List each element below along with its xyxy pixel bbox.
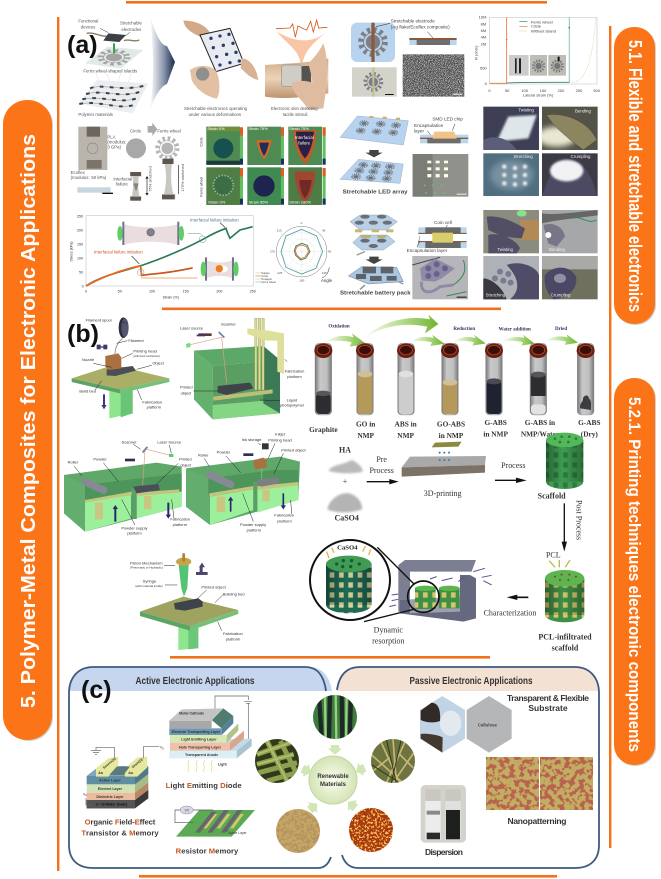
figure: selective laser sintering printer: platform: [173, 522, 188, 527]
figure: stretchable LED array: layer: [414, 129, 425, 134]
powder: CaSO4: [327, 493, 362, 512]
vial labels: GO in: [356, 419, 375, 428]
figure: inkjet powder printer: Printing head: [268, 437, 292, 442]
figure: ferris wheel device stack: Polymer materials: [78, 112, 113, 117]
diagram: resistor memory: V/I: [185, 808, 189, 812]
figure: electronic skin on forearm: Electronic skin detecting: [271, 106, 318, 111]
figure: stretchable battery pack: Encapsulation layer: [407, 248, 448, 253]
figure: stereolithography printer: platform: [287, 374, 302, 379]
figure: syringe extrusion printer: [130, 553, 245, 650]
photos: battery pack under deformation: Twisting: [497, 247, 514, 252]
panel a: flexible and stretchable electronics: [67, 14, 601, 299]
label: Organic Field-Effect Transistor & Memory: Transistor & Memory: [81, 829, 159, 838]
figure: strain heat maps: Strain 85%: [249, 199, 269, 204]
label: Resistor Memory: Resistor Memory: [176, 847, 239, 856]
figure: syringe extrusion printer: Syringe: [143, 579, 157, 584]
chart: stress vs strain: 50: [118, 289, 122, 293]
figure: stretchable electrode schematic: Stretchable electrode: [391, 19, 435, 24]
diagram: light emitting diode stack: Transparent Anode: [185, 753, 218, 757]
vial labels: [309, 418, 601, 440]
photos: battery pack under deformation: [483, 210, 598, 299]
figure: stretchable battery pack: [340, 215, 468, 299]
renewable materials hub: Materials: [320, 782, 347, 788]
figure: fused deposition printer: Nozzle: [82, 357, 95, 362]
figure: scaffold printing process: Process: [369, 466, 394, 475]
figure: graphite vial process: Reduction: [453, 327, 475, 332]
label: transparent and flexible substrate: Substrate: [528, 703, 568, 713]
chart: polar plot of angle: Angle: [321, 278, 333, 283]
diagram: organic field-effect transistor stack: Active Layer: [99, 779, 121, 783]
figure: scaffold printing process: HA: [339, 446, 351, 455]
label (a): (a): [67, 31, 98, 59]
vial labels: NMP: [357, 431, 375, 440]
chart: resistance vs lateral strain: Ferris wheel: [531, 19, 553, 24]
figure: scaffold printing process: +: [343, 477, 348, 486]
figure: tensile test specimens: Ferris wheel: [157, 129, 181, 134]
hexagon: cellulose: [467, 696, 512, 753]
renewable materials hub: [309, 756, 357, 804]
figure: scaffold printing process: Post Process: [575, 500, 584, 540]
right section pill: 5.2.1 Printing techniques electronic components: 5.2.1. Printing techniques electronic components: [625, 397, 644, 752]
renewable materials hub: Renewable: [317, 774, 349, 780]
chart: polar plot of angle: 270: [270, 250, 275, 254]
figure: tensile test specimens: PLA: [107, 134, 116, 139]
material photo: wheat: [371, 739, 415, 783]
panel header: active electronic applications: Active Electronic Applications: [136, 676, 255, 687]
left section pill: 5. Polymer-Metal Composites: [3, 100, 53, 741]
figure: scaffold printing process: Process: [501, 461, 526, 470]
figure: stereolithography printer: object: [181, 390, 192, 395]
powder: HA: [328, 460, 363, 473]
figure: syringe extrusion printer: (with material inside): [135, 584, 163, 588]
vial: G-ABS in NMP/Water: [529, 343, 547, 415]
chart: stress vs strain: 150: [183, 289, 189, 293]
chart: stress vs strain: Square: [261, 271, 270, 275]
chart: stress vs strain: 250: [250, 289, 256, 293]
label: Organic Field-Effect Transistor & Memory: Organic Field-Effect: [85, 818, 156, 827]
panel a: flexible and stretchable electronics: Crumpling: [571, 154, 591, 159]
figure: fused deposition printer: platform: [147, 405, 162, 410]
figure: stereolithography printer: Scanner: [221, 322, 236, 327]
figure: fused deposition printer: Filament spool: [86, 318, 112, 323]
figure: graphite vial process: [309, 315, 601, 440]
figure: selective laser sintering printer: Scanner: [122, 439, 137, 444]
chart: resistance vs lateral strain: Circle: [531, 24, 542, 29]
figure: inkjet powder printer: Fabrication: [274, 512, 294, 517]
vial: GO in NMP: [356, 343, 374, 415]
figure: strain heat maps: Circle: [200, 137, 204, 147]
right section pill: 5.1 Flexible and stretchable electronics: 5.1. Flexible and stretchable electronics: [625, 40, 645, 312]
chart: resistance vs lateral strain: [473, 14, 601, 98]
diagram: organic field-effect transistor stack: G: [85, 795, 87, 797]
figure: tensile test specimens: Interfacial: [113, 177, 132, 182]
arrows: process steps: [367, 478, 567, 600]
vial: ABS in NMP: [397, 343, 415, 415]
panel header: active electronic applications: [69, 667, 332, 868]
diagram: light emitting diode stack: Light Emitting Layer: [181, 737, 217, 741]
chart: resistance vs lateral strain: Lateral strain (%): [523, 93, 554, 98]
figure: strain heat maps: Strain 180%: [289, 199, 311, 204]
figure: tensile test specimens: Ecoflex: [71, 170, 86, 175]
figure: scaffold printing process: PCL: [546, 550, 561, 559]
arrows: materials toward hub: [299, 745, 368, 815]
chart: resistance vs lateral strain: 50: [505, 88, 510, 93]
photos: LED array under deformation: Bending: [575, 109, 591, 114]
figure: graphite vial process: Oxidation: [328, 325, 350, 330]
chart: resistance vs lateral strain: 2M: [481, 42, 486, 47]
chart: polar plot of angle: 0: [301, 221, 303, 225]
figure: selective laser sintering printer: platform: [127, 531, 142, 536]
figure: ferris wheel device stack: Functional: [78, 18, 98, 23]
diagram: light emitting diode stack: Light: [218, 762, 228, 766]
chart: resistance vs lateral strain: 200: [558, 88, 565, 93]
figure: strain heat maps: Strain 0%: [207, 126, 225, 131]
figure: tensile test specimens: 50 kPa): [91, 175, 107, 180]
magnified scaffold detail: CaSO4: [337, 544, 358, 551]
figure: selective laser sintering printer: Laser Source: [157, 439, 182, 444]
figure: syringe extrusion printer: Printed object: [201, 585, 227, 590]
figure: tensile test specimens: 75% stretched: [148, 166, 153, 192]
figure: scaffold printing process: CaSO4: [334, 514, 359, 523]
vial: G-ABS dry: [577, 343, 595, 415]
chart: stress vs strain: Hexagon: [261, 277, 272, 281]
chart: resistance vs lateral strain: 0: [485, 81, 488, 86]
figure: stretchable electronics in hands: Stretchable electronics operating: [184, 106, 248, 111]
vial: G-ABS in NMP: [485, 343, 503, 415]
chart: resistance vs lateral strain: 100: [521, 88, 529, 93]
figure: fused deposition printer: Filament: [128, 338, 144, 343]
figure: tensile test specimens: 175% stretched: [180, 164, 185, 192]
figure: tensile test specimens: (modulus:: [71, 175, 90, 180]
figure: stereolithography printer: Fabrication: [285, 368, 304, 373]
photos: LED array under deformation: Twisting: [518, 108, 535, 113]
chart: resistance vs lateral strain: 300: [593, 88, 601, 93]
figure: stretchable LED array: SMD LED chip: [432, 117, 463, 122]
panel a: flexible and stretchable electronics: Stretching: [513, 154, 533, 159]
chart: stress vs strain: 150: [77, 243, 83, 247]
figure: selective laser sintering printer: object: [180, 463, 192, 468]
figure: scaffold printing process: Scaffold: [538, 492, 566, 501]
diagram: light emitting diode stack: [169, 696, 252, 772]
figure: inkjet powder printer: Inkjet: [275, 431, 286, 436]
material photo: fungal fibres: [255, 739, 299, 783]
chart: stress vs strain: 250: [77, 214, 83, 218]
figure: inkjet powder printer: platform: [277, 518, 292, 523]
diagram: organic field-effect transistor stack: Drain(D): [131, 757, 144, 769]
figure: scaffold printing process: scaffold: [552, 643, 579, 652]
figure: inkjet powder printer: [186, 431, 307, 532]
chart: resistance vs lateral strain: 250: [576, 88, 583, 93]
figure: stereolithography printer: photopolymer: [280, 403, 305, 408]
figure: inkjet powder printer: Powder: [217, 450, 231, 455]
figure: selective laser sintering printer: Roller: [68, 459, 79, 464]
diagram: organic field-effect transistor stack: Au: [98, 771, 103, 775]
chart: stress vs strain: Interfacial failure initiation: [94, 249, 143, 254]
panel c: active and passive electronic applications: [69, 667, 599, 868]
label: transparent and flexible substrate: Transparent & Flexible: [507, 693, 589, 703]
right section pill: 5.1 Flexible and stretchable electronics: [614, 27, 656, 325]
magnified scaffold detail: [310, 540, 390, 620]
figure: graphite vial process: Dried: [555, 327, 567, 332]
vial labels: G-ABS: [484, 418, 507, 427]
figure: electronic skin on forearm: tactile stimuli: [283, 112, 307, 117]
chart: resistance vs lateral strain: Without island: [531, 28, 556, 33]
chart: resistance vs lateral strain: 0: [488, 88, 491, 93]
material photo: orange biomass: [349, 808, 393, 852]
figure: stereolithography printer: Laser source: [180, 325, 204, 330]
diagram: light emitting diode stack: Hole Transporting Layer: [179, 745, 222, 749]
chart: stress vs strain: Ferris wheel: [261, 280, 276, 284]
diagram: light emitting diode stack: Electron Transporting Layer: [172, 730, 221, 734]
diagram: organic field-effect transistor stack: [83, 746, 164, 808]
figure: ferris wheel device stack: [78, 18, 148, 117]
chart: stress vs strain: 0: [85, 289, 87, 293]
hexagon: cellulose film photo: [420, 696, 465, 753]
chart: stress vs strain: 100: [149, 289, 155, 293]
chart: polar plot of angle: 45: [322, 229, 326, 233]
vial labels: ABS in: [395, 419, 417, 428]
figure: ferris wheel device stack: devices: [81, 25, 95, 30]
chart: resistance vs lateral strain: 4M: [481, 35, 486, 40]
diagram: organic field-effect transistor stack: V: [83, 792, 85, 796]
arrow: large dark chevron: [150, 15, 175, 110]
figure: stretchable LED array: Encapsulation: [414, 123, 444, 128]
label: nanopatterning: Nanopatterning: [508, 816, 566, 826]
diagram: light emitting diode stack: Metal Cathode: [179, 711, 204, 715]
figure: electronic skin on forearm: [265, 20, 328, 117]
figure: inkjet powder printer: Printed object: [281, 448, 307, 453]
chart: stress vs strain: 100: [77, 257, 83, 261]
chart: stress vs strain: 0: [82, 284, 84, 288]
chart: stress vs strain: Stress (kPa): [70, 242, 74, 262]
diagram: organic field-effect transistor stack: Source(S): [102, 757, 117, 770]
panel header: passive electronic applications: Passive Electronic Applications: [410, 676, 533, 687]
vial labels: NMP/Water: [521, 430, 560, 439]
figure: inkjet powder printer: platform: [247, 527, 262, 532]
figure: fused deposition printer: (with feed mechanism): [133, 354, 160, 358]
figure: scaffold printing process: [310, 433, 592, 652]
vial labels: GO-ABS: [437, 419, 465, 428]
right section pill: 5.2.1 Printing techniques electronic components: [614, 378, 656, 766]
vial labels: in NMP: [439, 431, 464, 440]
figure: syringe extrusion printer: Building bed: [223, 591, 245, 596]
vial labels: in NMP: [483, 430, 508, 439]
chart: polar plot of angle: 135: [322, 271, 327, 275]
figure: syringe extrusion printer: Piston Mechanism: [130, 560, 163, 565]
figure: strain heat maps: [200, 126, 326, 205]
photos: battery pack under deformation: Crumpling: [551, 293, 571, 298]
chart: polar plot of angle: 180: [299, 279, 305, 283]
label: dispersion: Dispersion: [425, 847, 463, 857]
chart: resistance vs lateral strain: R (ohm): [473, 45, 478, 60]
figure: ferris wheel device stack: Ferris wheel-shaped islands: [83, 69, 137, 74]
figure: stereolithography printer: [180, 318, 305, 419]
chart: stress vs strain: [70, 214, 276, 299]
photos: battery pack under deformation: Stretching: [486, 293, 506, 298]
figure: syringe extrusion printer: Fabrication: [223, 631, 243, 636]
diagram: organic field-effect transistor stack: Au: [128, 771, 133, 775]
label (c): (c): [81, 676, 112, 704]
chart: stress vs strain: Circle: [261, 274, 269, 278]
figure: selective laser sintering printer: Powder supply: [121, 525, 147, 530]
chart: resistance vs lateral strain: 150: [540, 88, 547, 93]
arrows: process flow: [325, 315, 578, 347]
figure: stereolithography printer: Liquid: [287, 397, 297, 402]
figure: syringe extrusion printer: platform: [226, 637, 241, 642]
figure: stretchable LED array: [340, 116, 468, 157]
figure: strain heat maps: Strain 75%: [289, 126, 309, 131]
figure: fused deposition printer: Printing head: [133, 348, 157, 353]
label (b): (b): [67, 320, 99, 348]
figure: selective laser sintering printer: Printed: [179, 457, 192, 462]
vial labels: NMP: [397, 431, 415, 440]
chart: stress vs strain: Interfacial failure initiation: [190, 218, 239, 223]
figure: inkjet powder printer: Ink storage: [242, 437, 262, 442]
figure: graphite vial process: Water addition: [499, 327, 531, 332]
resorption chamber: [364, 547, 492, 622]
figure: scaffold printing process: Dynamic: [374, 625, 403, 634]
diagram: organic field-effect transistor stack: n⁺ Si Wafer (Gate): [96, 803, 128, 807]
diagram: organic field-effect transistor stack: Electret Layer: [98, 787, 123, 791]
vial labels: (Dry): [581, 430, 598, 439]
figure: stretchable electrode schematic: (Ag flake/Ecoflex composite): [391, 24, 450, 29]
chart: stress vs strain: 50: [79, 271, 83, 275]
diagram: resistor memory: Active Layer: [228, 831, 248, 835]
figure: scaffold printing process: Pre: [376, 455, 387, 464]
vial labels: G-ABS in: [525, 418, 555, 427]
figure: stretchable electronics in hands: under various deformations: [189, 112, 241, 117]
figure: fused deposition printer: Build bed: [79, 388, 96, 393]
figure: stretchable battery pack: Coin cell: [434, 220, 452, 225]
figure: scaffold printing process: 3D-printing: [424, 489, 462, 498]
figure: strain heat maps: Strain 0%: [208, 199, 226, 204]
diagram: organic field-effect transistor stack: D: [162, 748, 164, 750]
chart: polar plot of angle: 225: [277, 271, 283, 275]
vial labels: G-ABS: [578, 418, 601, 427]
photos: LED array under deformation: [483, 107, 598, 150]
figure: tensile test specimens: (modulus:: [107, 139, 126, 144]
chart: stress vs strain: Strain (%): [163, 295, 179, 299]
diagram: organic field-effect transistor stack: V: [160, 746, 162, 750]
label: transparent and flexible substrate: [507, 693, 589, 713]
figure: fused deposition printer: [72, 317, 169, 418]
block: 3D printing bed: [402, 442, 486, 477]
figure: syringe extrusion printer: (Pneumatic or Hydraulic): [130, 566, 163, 570]
figure: strain heat maps: failure: [298, 140, 311, 145]
panel a: flexible and stretchable electronics: Stretchable LED array: [343, 189, 409, 195]
arrows: PCL infiltration: [549, 560, 570, 567]
figure: ferris wheel device stack: Stretchable: [120, 21, 142, 26]
chart: resistance vs lateral strain: 8M: [481, 21, 486, 26]
figure: tensile test specimens: 3 GPa): [107, 144, 122, 149]
figure: stretchable electrode schematic: [351, 19, 464, 97]
photo: dispersion vials: [421, 785, 466, 843]
diagram: organic field-effect transistor stack: Dielectric Layer: [96, 795, 124, 799]
figure: stereolithography printer: Printed: [180, 384, 193, 389]
left section pill: 5. Polymer-Metal Composites: 5. Polymer-Metal Composites for Electronic Applications: [18, 134, 40, 708]
photos: battery pack under deformation: Bending: [549, 247, 565, 252]
material photo: seeds: [276, 809, 320, 853]
figure: scaffold printing process: PCL-infiltrated: [538, 632, 592, 641]
chart: polar plot of angle: 315: [277, 229, 282, 233]
scaffold cylinder: [546, 433, 583, 489]
figure: stretchable battery pack: Stretchable battery pack: [340, 291, 412, 297]
panel header: passive electronic applications: [337, 667, 599, 868]
figure: scaffold printing process: resorption: [372, 637, 405, 646]
vial: Graphite: [314, 343, 332, 415]
material photo: trees: [313, 695, 357, 739]
chart: polar plot of angle: [270, 221, 333, 283]
figure: scaffold printing process: Characterization: [484, 609, 536, 618]
label: Organic Field-Effect Transistor & Memory: [81, 818, 159, 838]
figure: selective laser sintering printer: Powder: [93, 457, 108, 462]
figure: stretchable electronics in hands: [183, 21, 258, 117]
figure: strain heat maps: Ferris wheel: [200, 177, 204, 197]
figure: selective laser sintering printer: Fabrication: [170, 517, 190, 522]
label: Light Emitting Diode: Light Emitting Diode: [166, 781, 242, 790]
photo: nanopatterning micrographs: [486, 757, 593, 810]
figure: fused deposition printer: Fabrication: [142, 399, 162, 404]
figure: selective laser sintering printer: [64, 439, 192, 536]
panel b: printing techniques: [64, 315, 601, 652]
vial labels: Graphite: [309, 425, 338, 434]
figure: inkjet powder printer: Powder supply: [240, 522, 266, 527]
chart: resistance vs lateral strain: 10M: [479, 14, 486, 19]
figure: tensile test specimens: failure: [116, 182, 128, 187]
figure: strain heat maps: Strain 75%: [248, 126, 268, 131]
hexagon: cellulose: Cellulose: [478, 722, 498, 727]
chart: stress vs strain: 200: [77, 228, 83, 232]
figure: fused deposition printer: Object: [152, 361, 165, 366]
figure: tensile test specimens: [71, 123, 185, 201]
figure: tensile test specimens: Circle: [130, 129, 142, 134]
PCL infused scaffold cylinder: [545, 570, 584, 622]
diagram: resistor memory: [175, 806, 255, 837]
chart: resistance vs lateral strain: 6M: [481, 28, 486, 33]
chart: polar plot of angle: 90: [328, 250, 332, 254]
figure: inkjet powder printer: Roller: [198, 453, 209, 458]
vial: GO-ABS in NMP: [441, 343, 459, 415]
chart: stress vs strain: 200: [216, 289, 222, 293]
figure: strain heat maps: Interfacial: [295, 135, 314, 140]
figure: ferris wheel device stack: electrodes: [121, 27, 141, 32]
chart: resistance vs lateral strain: 500: [480, 66, 487, 71]
